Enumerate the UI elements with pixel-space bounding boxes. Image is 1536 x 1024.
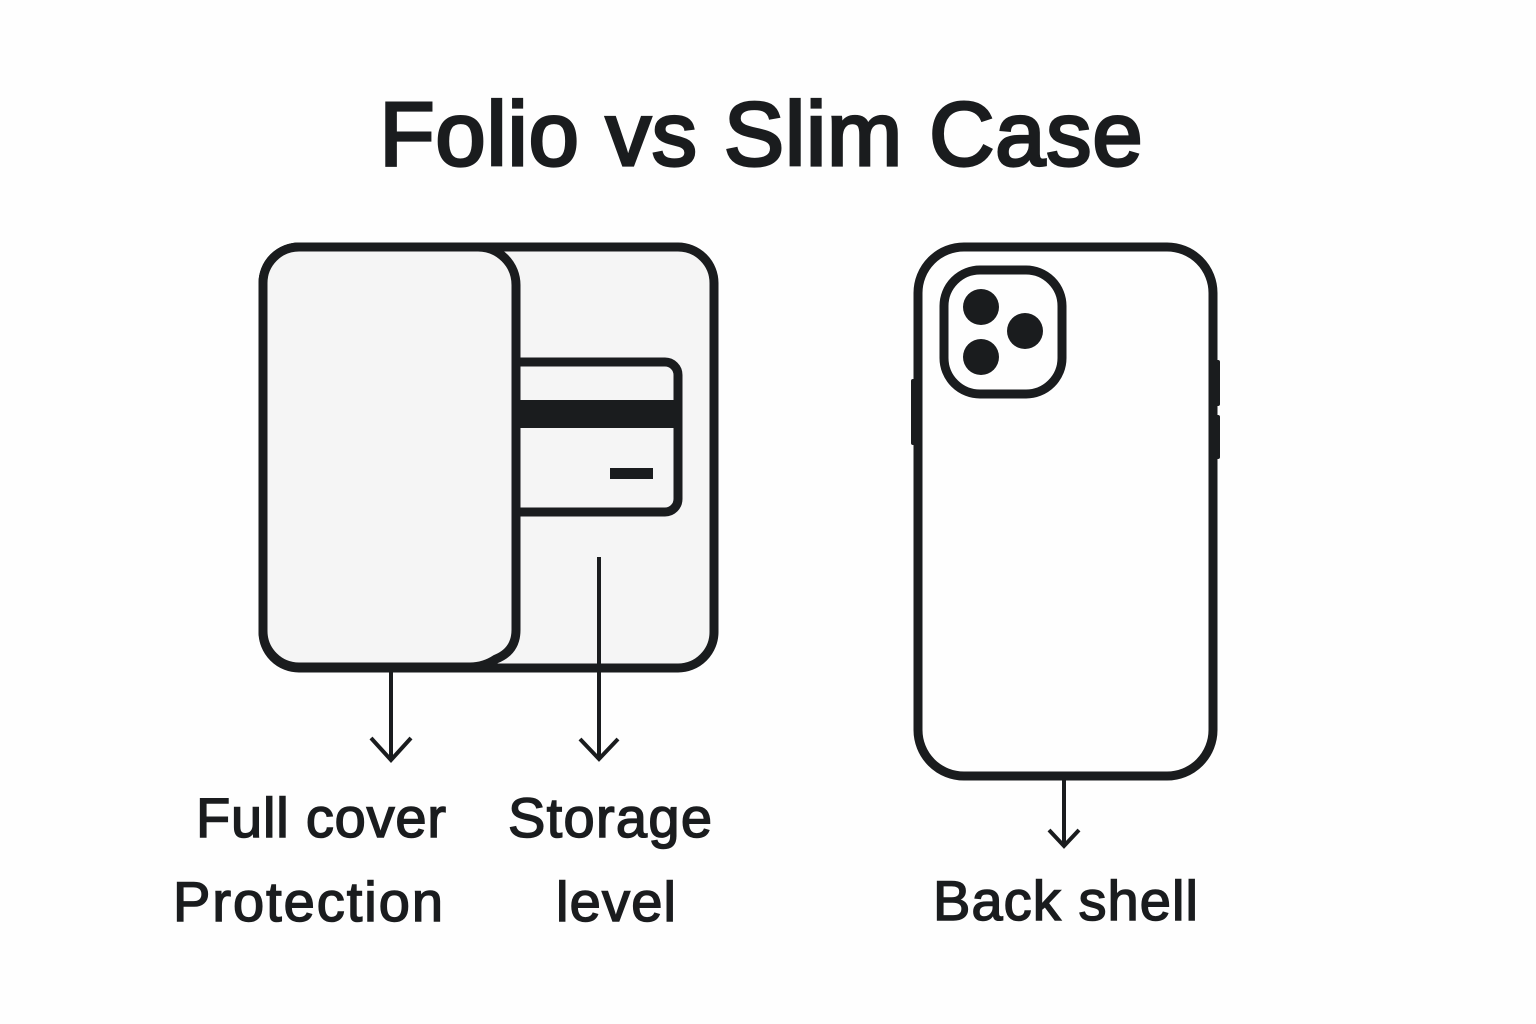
label: storage level: level [556,870,676,933]
label: full cover protection [173,786,446,933]
camera module [944,270,1062,394]
label: full cover protection: Full cover [196,786,446,849]
icon: slim case [911,247,1220,776]
label: back shell: Back shell [933,869,1198,932]
label: storage level [508,786,712,933]
folio front cover [263,247,516,667]
slim case body [918,247,1213,776]
label: storage level: Storage [508,786,712,849]
side buttons [911,360,1220,459]
icon: folio case [263,247,714,668]
folio outer shell [263,247,714,668]
credit card [500,362,678,512]
arrow: back shell [1049,778,1079,846]
arrow: full cover protection [371,670,411,760]
label: full cover protection: Protection [173,870,443,933]
arrow: storage level [580,557,618,759]
title: Folio vs Slim Case [380,85,1142,185]
